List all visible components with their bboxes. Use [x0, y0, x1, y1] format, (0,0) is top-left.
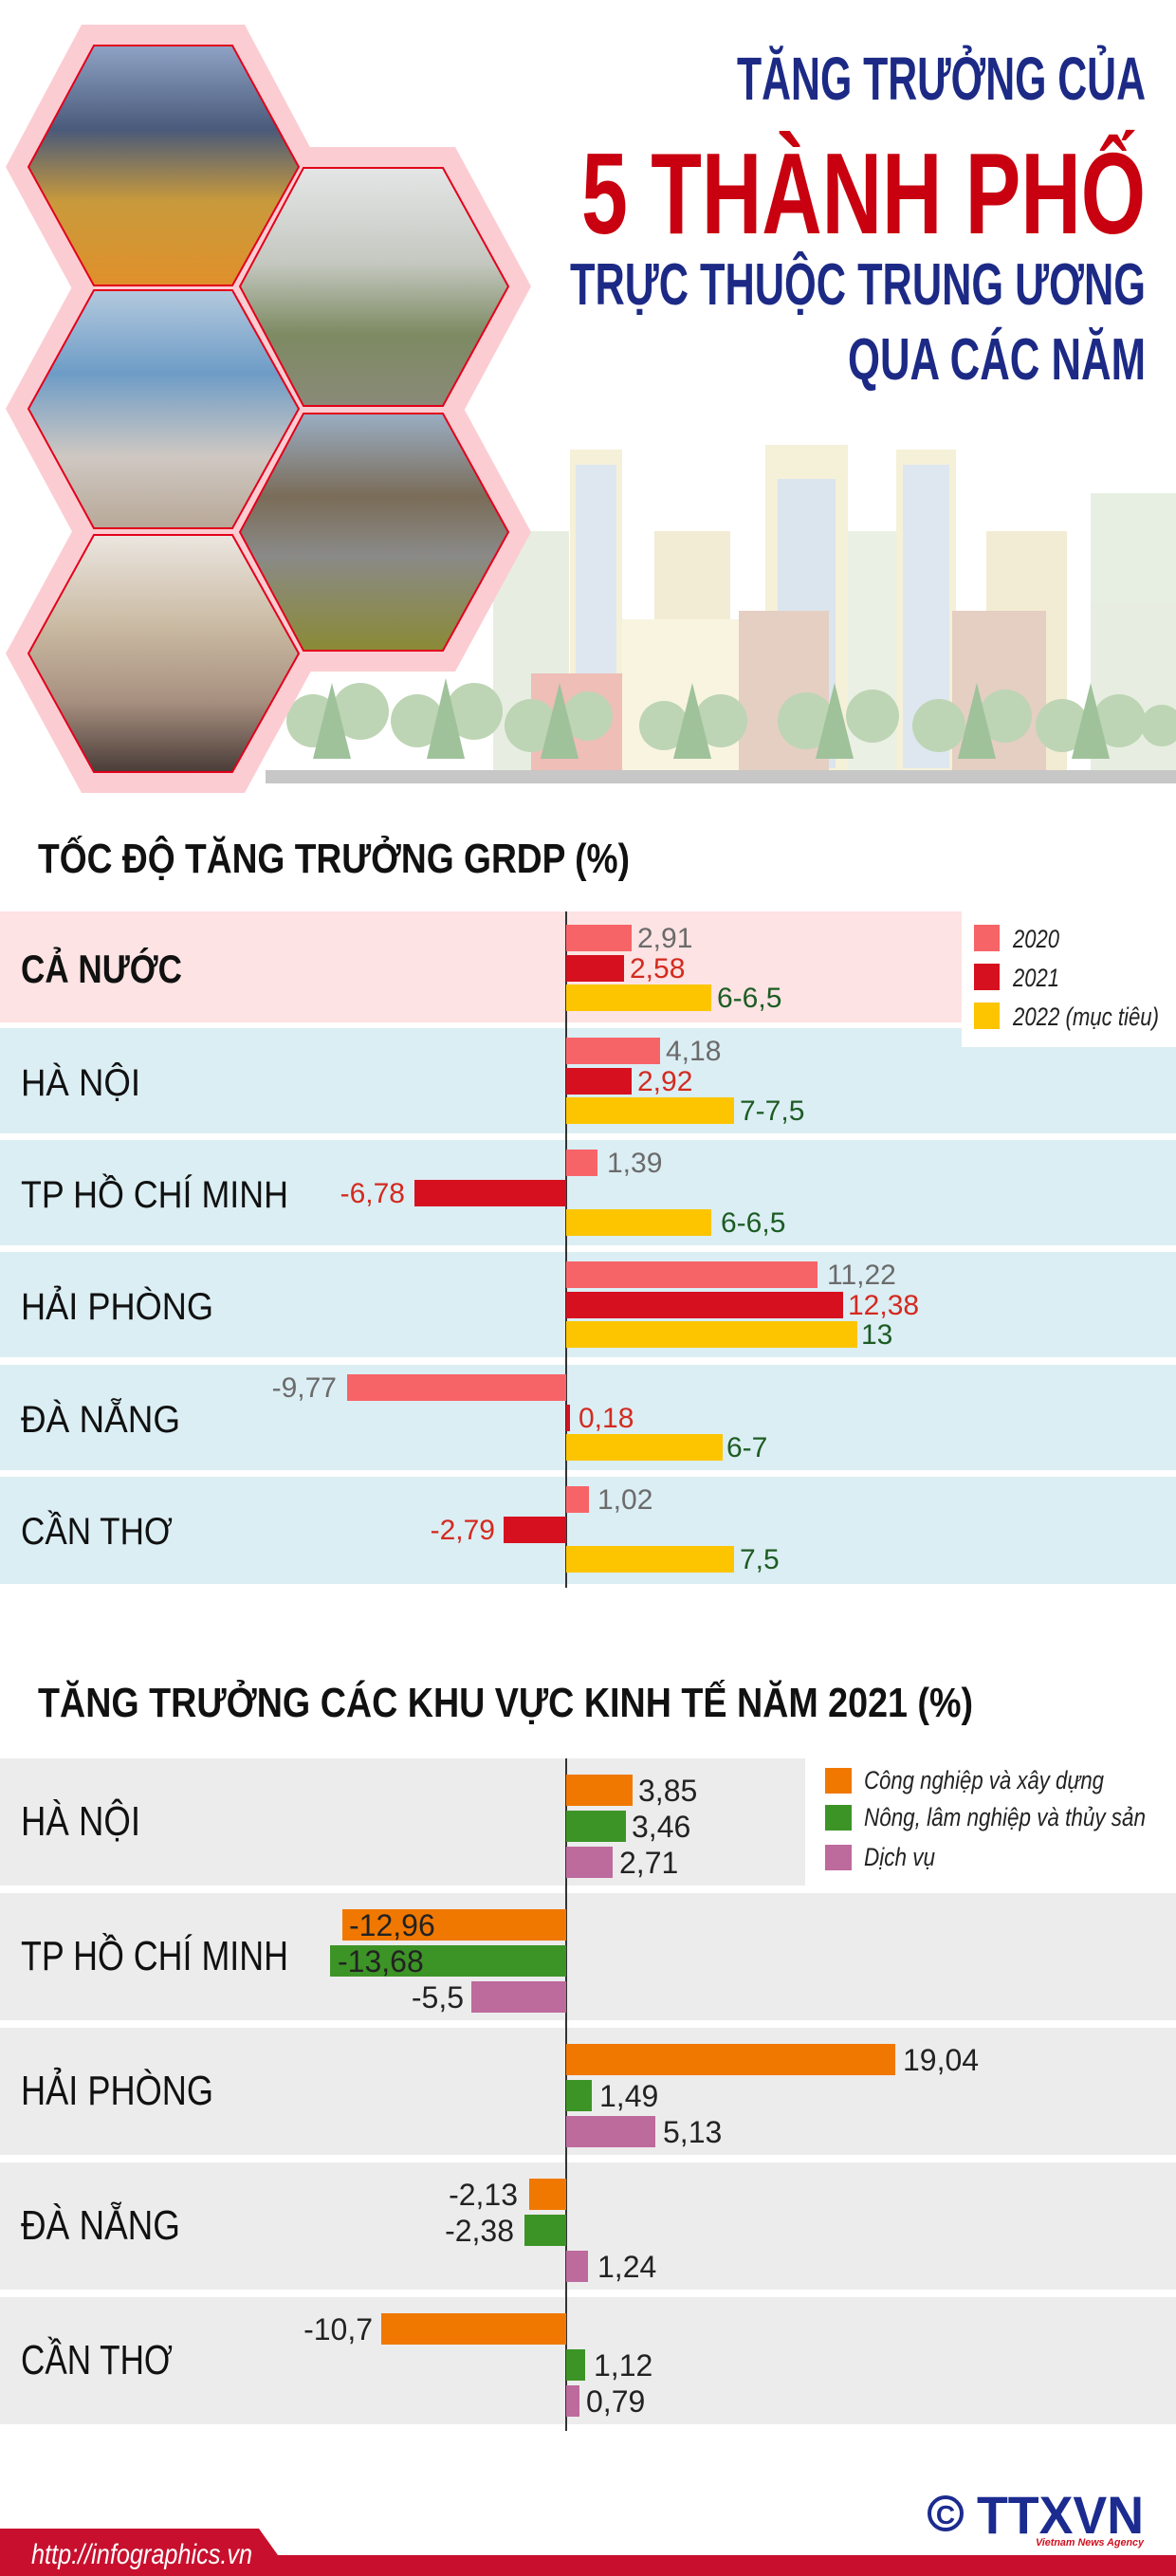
row: Đà Nẵng [21, 2178, 656, 2284]
row: Hải Phòng: 12,38 [848, 1290, 919, 1321]
legend: sectors [805, 1758, 1176, 1886]
row: Cả nước: 6-6,5 [717, 983, 781, 1014]
row: Đà Nẵng: -2,38 [445, 2214, 514, 2248]
row: TP Hồ Chí Minh: -12,96 [349, 1908, 435, 1942]
row: Đà Nẵng: 6-7 [726, 1432, 767, 1463]
heading: sector growth: TĂNG TRƯỞNG CÁC KHU VỰC KINH TẾ NĂM 2021 (%) [38, 1678, 973, 1726]
row: Hà Nội: 4,18 [666, 1036, 721, 1067]
row: Cả nước: 2,58 [630, 953, 685, 984]
row: Cần Thơ: -2,79 [431, 1515, 495, 1546]
row: Đà Nẵng: ĐÀ NẴNG [21, 1397, 180, 1441]
row: Cần Thơ [21, 2312, 652, 2419]
row: Hà Nội: 3,46 [632, 1810, 690, 1844]
footer bar: http://infographics.vn [31, 2539, 252, 2570]
row: Cả nước [21, 923, 781, 1014]
photo: Da Nang [28, 290, 299, 528]
row: Hải Phòng: 5,13 [663, 2115, 722, 2149]
row: Cần Thơ [21, 1484, 780, 1575]
row: TP Hồ Chí Minh [21, 1148, 785, 1239]
legend: sectors: Công nghiệp và xây dựng [864, 1766, 1104, 1794]
row: Đà Nẵng: 0,18 [579, 1403, 634, 1434]
row: Hải Phòng: HẢI PHÒNG [21, 2067, 213, 2114]
row: Hà Nội: HÀ NỘI [21, 1061, 140, 1104]
row: TP Hồ Chí Minh: TP HỒ CHÍ MINH [21, 1172, 288, 1216]
row: Hải Phòng [21, 1260, 919, 1351]
legend: years: 2020 [1012, 925, 1059, 953]
footer bar [0, 2529, 1176, 2576]
row: Cả nước: 2,91 [637, 923, 692, 954]
legend: sectors: Dịch vụ [864, 1843, 935, 1871]
row: Hà Nội: 2,71 [619, 1846, 678, 1880]
row: Cần Thơ: 0,79 [586, 2384, 645, 2419]
row: TP Hồ Chí Minh: TP HỒ CHÍ MINH [21, 1932, 288, 1979]
row: TP Hồ Chí Minh: 1,39 [607, 1148, 662, 1179]
main title [570, 44, 1146, 393]
logo: TTXVN: TTXVN [977, 2485, 1144, 2545]
row: Hà Nội: 2,92 [637, 1066, 692, 1097]
row: Cần Thơ: -10,7 [303, 2312, 373, 2346]
row: Hà Nội: 3,85 [638, 1774, 697, 1808]
row: Hải Phòng [21, 2043, 979, 2149]
row: Đà Nẵng: ĐÀ NẴNG [21, 2201, 180, 2249]
row: Hải Phòng: HẢI PHÒNG [21, 1284, 213, 1328]
row: Đà Nẵng: -2,13 [449, 2178, 518, 2212]
chart: GRDP growth [0, 911, 1176, 1588]
logo: TTXVN: Vietnam News Agency [1036, 2537, 1145, 2548]
row: TP Hồ Chí Minh: -5,5 [412, 1980, 464, 2015]
photo: Can Tho [28, 535, 299, 772]
row: Hải Phòng: 19,04 [903, 2043, 979, 2077]
row: TP Hồ Chí Minh: -6,78 [340, 1178, 405, 1209]
row: Đà Nẵng: 1,24 [597, 2250, 656, 2284]
legend: years [962, 911, 1176, 1047]
logo: TTXVN: C [936, 2500, 955, 2530]
row: Cần Thơ: 1,12 [594, 2348, 652, 2383]
row: Đà Nẵng [21, 1372, 767, 1463]
row: TP Hồ Chí Minh: -13,68 [338, 1944, 424, 1978]
photo: Ho Chi Minh City [240, 168, 508, 406]
row: Cần Thơ: 7,5 [740, 1544, 780, 1575]
row: Hà Nội [21, 1774, 697, 1880]
row: Hải Phòng: 1,49 [599, 2079, 658, 2113]
chart: sector growth 2021 [0, 1758, 1176, 2431]
heading: GRDP growth: TỐC ĐỘ TĂNG TRƯỞNG GRDP (%) [38, 834, 630, 882]
row: Hải Phòng: 13 [861, 1319, 892, 1351]
photo hexagon collage [6, 25, 531, 793]
legend: years: 2021 [1012, 964, 1059, 992]
row: Cần Thơ: CẦN THƠ [21, 2336, 173, 2383]
row: TP Hồ Chí Minh: 6-6,5 [721, 1207, 785, 1239]
photo: Hai Phong [240, 414, 508, 651]
row: Hà Nội: 7-7,5 [740, 1095, 804, 1127]
row: Cần Thơ: CẦN THƠ [21, 1509, 173, 1553]
row: Cả nước: CẢ NƯỚC [21, 946, 182, 991]
row: Cần Thơ: 1,02 [597, 1484, 652, 1516]
background city illustration [266, 445, 1176, 783]
row: Đà Nẵng: -9,77 [272, 1372, 337, 1404]
row: Hà Nội: HÀ NỘI [21, 1797, 140, 1845]
photo: Hanoi [28, 46, 299, 285]
row: Hà Nội [21, 1036, 804, 1127]
row: TP Hồ Chí Minh [21, 1908, 566, 2015]
row: Hải Phòng: 11,22 [827, 1260, 896, 1291]
